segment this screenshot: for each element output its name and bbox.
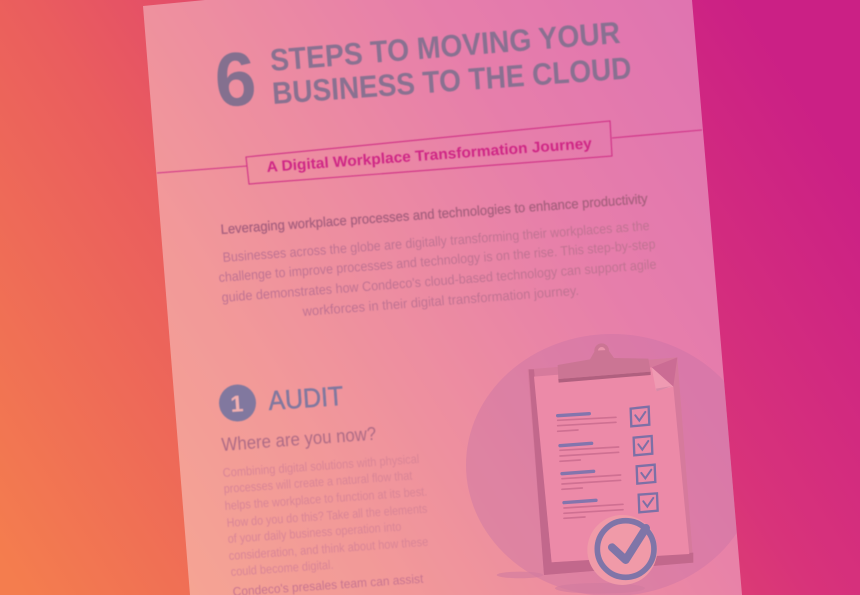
title: 6 <box>212 36 259 124</box>
step 1 body text: could become digital. <box>230 558 334 579</box>
step 1 heading with number badge: 1 <box>230 390 244 417</box>
step 1 heading with number badge <box>219 381 344 422</box>
intro text <box>218 191 657 319</box>
step 1 subheading: Where are you now? <box>221 424 377 455</box>
step 1 body text: consideration, and think about how these <box>228 535 429 563</box>
intro text: guide demonstrates how Condeco's cloud-based technology can support agile <box>221 257 657 305</box>
step 1 body text: of your daily business operation into <box>227 520 402 546</box>
intro text: challenge to improve processes and technology is on the rise. This step-by-step <box>218 236 656 285</box>
intro text: Businesses across the globe are digitally transforming their workplaces as the <box>222 218 650 265</box>
step 1 body text: helps the workplace to function at its best. <box>224 485 428 513</box>
step 1 body text: Combining digital solutions with physical <box>222 452 420 480</box>
subtitle banner: A Digital Workplace Transformation Journey <box>266 135 593 176</box>
step 1 heading with number badge: AUDIT <box>267 381 344 416</box>
title: BUSINESS TO THE CLOUD <box>271 50 633 111</box>
intro text: Leveraging workplace processes and technologies to enhance productivity <box>220 191 648 237</box>
step 1 body text <box>222 452 429 595</box>
title <box>212 15 633 124</box>
intro text: workforces in their digital transformation journey. <box>301 283 579 319</box>
illustration: clipboard checklist <box>466 334 758 595</box>
title: STEPS TO MOVING YOUR <box>269 15 621 78</box>
step 1 body text: How do you do this? Take all the elements <box>226 502 428 530</box>
subtitle banner <box>157 121 702 184</box>
step 1 body text: processes will create a natural flow that <box>223 468 413 496</box>
panel: tilted document page <box>143 0 758 595</box>
